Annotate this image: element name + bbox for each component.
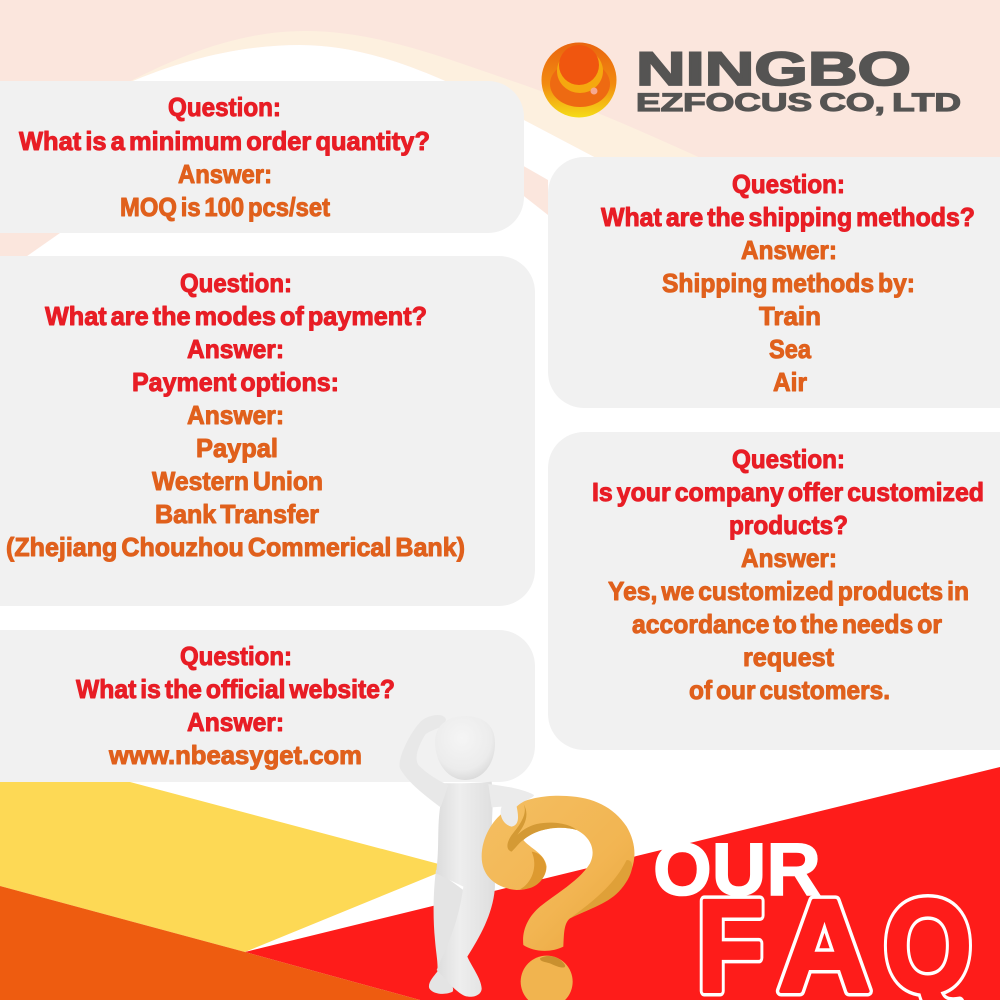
answer text: of our customers. [689,675,890,705]
question text: What is the official website? [76,674,395,704]
panel: customized products [548,432,1000,750]
panel: official website [0,630,535,782]
logo: Ningbo Ezfocus [542,42,961,118]
heading: FAQ outlined [697,872,972,1000]
figure: head [435,716,495,780]
question text [19,92,430,156]
answer text: Answer: [178,159,272,189]
answer text: Shipping methods by: [662,268,915,298]
question text: Answer: [187,707,284,737]
question text: Payment options: [132,367,339,397]
answer text [662,235,915,397]
answer text: Bank Transfer [155,499,319,529]
question text: Question: [732,169,845,199]
figure: raised arm [400,715,448,807]
answer text: Air [773,367,807,397]
answer text: Western Union [152,466,323,496]
question text: Question: [180,641,292,671]
bottom shape: orange band [0,886,420,1000]
answer text: Yes, we customized products in [608,576,969,606]
answer text: accordance to the needs or [632,609,942,639]
question text [45,268,427,397]
question text: Question: [168,92,281,122]
bottom shape: yellow band [0,782,450,952]
company name: NINGBO [636,42,911,95]
answer text: Paypal [196,433,278,463]
answer text: Answer: [741,235,837,265]
heading: OUR: OUR [653,828,821,911]
answer text: Train [759,301,821,331]
answer text: request [743,642,834,672]
answer text: (Zhejiang Chouzhou Commerical Bank) [6,532,465,562]
question text: Answer: [187,334,284,364]
panel: shipping methods [548,157,1000,408]
question text: Question: [180,268,292,298]
illustration: white figure with question mark [400,715,634,1000]
answer text [6,400,465,562]
question text: What are the modes of payment? [45,301,427,331]
question mark [482,796,634,1000]
question text [76,641,395,737]
question text: Is your company offer customized [592,477,984,507]
answer text: MOQ is 100 pcs/set [120,192,330,222]
panel: minimum order quantity [0,81,524,233]
icon: orange sphere [542,42,616,118]
answer text [608,543,969,705]
question text: products? [729,510,848,540]
question text: What are the shipping methods? [601,202,975,232]
answer text: Answer: [741,543,837,573]
figure: arm and hand on question mark [488,784,534,827]
question text [592,444,984,540]
panel: modes of payment [0,256,535,606]
answer text: Sea [769,334,811,364]
company subtitle: EZFOCUS CO, LTD [636,89,961,117]
question text: Question: [732,444,845,474]
answer text [120,159,330,222]
question text [601,169,975,232]
answer text: Answer: [187,400,284,430]
figure: torso and right leg [436,782,495,997]
answer text: www.nbeasyget.com [108,740,362,770]
bottom shape: red band [245,767,1000,1000]
question text: What is a minimum order quantity? [19,126,430,156]
figure: left leg [429,870,463,994]
